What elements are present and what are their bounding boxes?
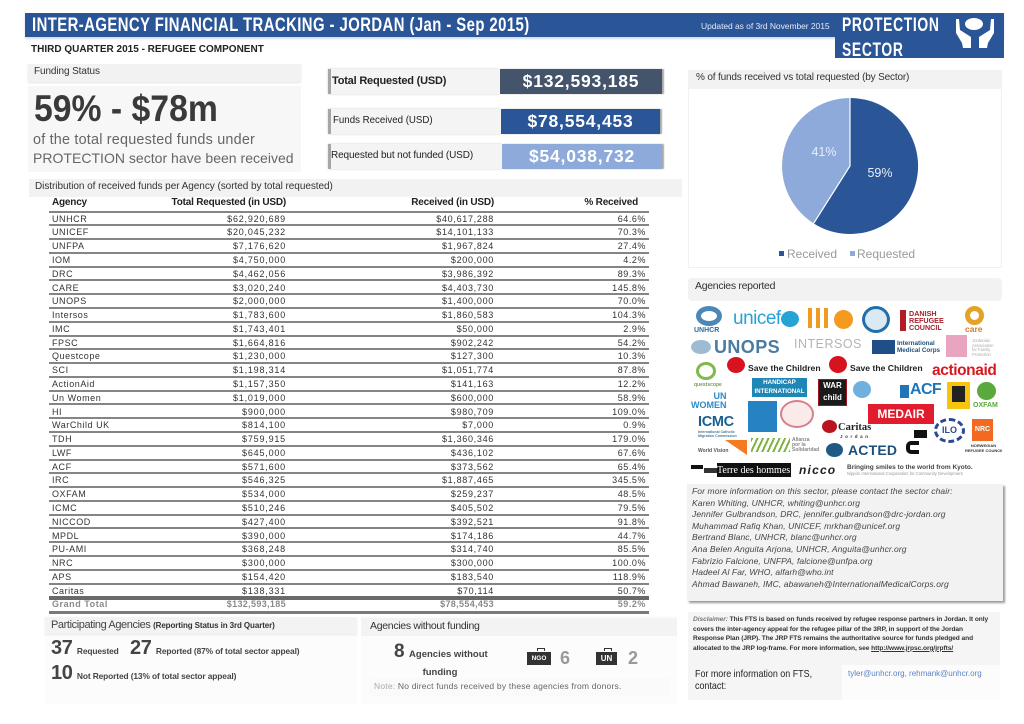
NGO count: 6	[560, 648, 570, 668]
agency funding table: 10.3%	[618, 351, 646, 361]
agency funding table: $1,019,000	[233, 393, 286, 403]
agency funding table: WarChild UK	[52, 420, 110, 430]
logo: Caritas	[822, 420, 871, 439]
logo: NRC: NRC	[975, 426, 990, 433]
agency funding table: $1,887,465	[442, 475, 494, 485]
agency funding table: 4.2%	[623, 255, 646, 265]
logo: World Vision: World Vision	[698, 448, 728, 454]
logo: actionaid: actionaid	[932, 362, 996, 379]
agency funding table: 345.5%	[612, 475, 646, 485]
agency funding table: Caritas	[52, 586, 84, 596]
agency funding table: $368,248	[242, 544, 286, 554]
logo: Intersos: INTERSOS	[794, 337, 862, 351]
pie legend: Received	[787, 247, 837, 261]
agencies without funding count: 8 Agencies without	[394, 641, 488, 662]
funding status heading: Funding Status	[34, 66, 100, 77]
agency funding table: NICCOD	[52, 517, 91, 527]
agency funding table: $62,920,689	[227, 214, 286, 224]
agency funding table: 65.4%	[618, 462, 646, 472]
agency funding table: IRC	[52, 475, 69, 485]
logo: MPDL emblem	[780, 400, 814, 428]
agency funding table: $1,783,600	[233, 310, 286, 320]
logo: Save the Children Jordan: Save the Children	[850, 363, 923, 373]
agency funding table: $3,986,392	[442, 269, 494, 279]
agency funding table: NRC	[52, 558, 73, 568]
agency funding table: 54.2%	[618, 338, 646, 348]
total requested value	[500, 69, 662, 94]
distribution heading: Distribution of received funds per Agency (sorted by total requested)	[35, 181, 333, 192]
logo: NRC	[965, 419, 1002, 453]
pie chart	[779, 98, 918, 261]
grand total row: Grand Total	[52, 599, 108, 609]
not funded label	[328, 144, 502, 169]
logo: dove emblem	[748, 401, 777, 432]
agency funding table: $427,400	[242, 517, 286, 527]
agency funding table: $1,157,350	[233, 379, 286, 389]
logo: UNHCR: UNHCR	[694, 327, 719, 334]
total requested label: Total Requested (USD)	[332, 75, 446, 87]
pie heading	[689, 71, 1001, 89]
panel: funds received	[327, 108, 662, 135]
disclaimer	[688, 612, 1000, 665]
agencies without funding count: funding	[423, 667, 457, 678]
agency funding table: 44.7%	[618, 530, 646, 540]
icon: NGO: NGO	[532, 655, 546, 662]
logo: Alianza por la Solidaridad	[751, 437, 819, 453]
agency funding table: PU-AMI	[52, 544, 87, 554]
without funding heading	[361, 618, 677, 636]
subtitle: THIRD QUARTER 2015 - REFUGEE COMPONENT	[31, 44, 264, 55]
table header: % Received	[584, 197, 638, 208]
logo: FPSC	[946, 335, 994, 357]
logo: unicef: unicef	[733, 308, 781, 329]
agency funding table: UNOPS	[52, 296, 87, 306]
agency funding table: $814,100	[242, 420, 286, 430]
logo: International Medical Corps: International Medical Corps	[897, 340, 940, 354]
logo: UNHCR	[694, 306, 722, 334]
agency funding table: $980,709	[451, 406, 494, 416]
logo: Save the Children: Save the Children	[748, 363, 821, 373]
FTS contact emails	[842, 665, 1000, 700]
headline figure: 59% - $78m	[34, 87, 218, 129]
logo: questcope	[694, 362, 722, 388]
grand total row: 59.2%	[618, 599, 646, 609]
agency funding table: $314,740	[451, 544, 494, 554]
agency funding table: $2,000,000	[233, 296, 286, 306]
agency funding table: $405,502	[451, 503, 494, 513]
header banner	[25, 13, 1004, 37]
agency funding table: $436,102	[451, 448, 494, 458]
logo: PU-AMI arrow	[906, 430, 927, 454]
agency funding table: $1,051,774	[442, 365, 494, 375]
logo: Terre des hommes: Terre des hommes	[717, 465, 790, 476]
agency funding table: 179.0%	[612, 434, 646, 444]
agencies without funding count	[394, 641, 488, 678]
reported count: 27 Reported (87% of total sector appeal)	[130, 637, 299, 659]
agency funding table: 109.0%	[612, 406, 646, 416]
logo: ICMC	[698, 414, 737, 438]
agency funding table: $259,237	[451, 489, 494, 499]
table header	[49, 197, 649, 213]
agency funding table: FPSC	[52, 338, 78, 348]
agency funding table: ACF	[52, 462, 72, 472]
logo: Handicap International: HANDICAP INTERNATIONAL	[754, 379, 805, 394]
agency funding table: 100.0%	[612, 558, 646, 568]
agency funding table: 118.9%	[613, 572, 646, 582]
logo: OXFAM: OXFAM	[973, 402, 998, 409]
agency funding table: HI	[52, 406, 62, 416]
logo: care: care	[965, 324, 982, 334]
agency funding table: UNICEF	[52, 227, 89, 237]
agency funding table: $534,000	[242, 489, 286, 499]
not funded value: $54,038,732	[529, 146, 635, 166]
funds received label: Funds Received (USD)	[333, 115, 433, 126]
agency funding table: Questcope	[52, 351, 100, 361]
logo: care	[965, 306, 984, 334]
icon: protecting hands	[956, 18, 994, 48]
logo: ILO	[934, 418, 965, 443]
panel: participating agencies	[45, 617, 357, 704]
agency funding table: 58.9%	[618, 393, 646, 403]
logo: UNFPA	[808, 308, 853, 329]
agency funding table: $7,176,620	[233, 241, 286, 251]
sector badge	[835, 13, 1004, 58]
logo: FPSC: Jordanian Association for Family Protection	[972, 338, 993, 357]
not funded label: Requested but not funded (USD)	[331, 150, 473, 161]
agency funding table: 89.3%	[618, 269, 646, 279]
table header: Received (in USD)	[411, 197, 494, 208]
total requested label	[328, 69, 500, 94]
update date: Updated as of 3rd November 2015	[701, 21, 830, 31]
agency funding table: $4,462,056	[233, 269, 286, 279]
logo: ACF: ACF	[910, 381, 941, 398]
agency funding table: $7,000	[462, 420, 494, 430]
agency logos	[691, 306, 1002, 477]
funding note	[369, 678, 669, 696]
pie legend	[779, 247, 915, 261]
agency funding table: $40,617,288	[436, 214, 494, 224]
logo: Medair	[868, 404, 934, 424]
logo: ICMC: International Catholic Migration Commission	[698, 430, 737, 438]
logo: Medair: MEDAIR	[877, 407, 925, 421]
agency funding table: 0.9%	[623, 420, 646, 430]
pie legend: Requested	[857, 247, 915, 261]
not reported count: 10 Not Reported (13% of total sector appeal)	[51, 662, 236, 684]
agency funding table: $50,000	[457, 324, 494, 334]
agency funding table: $600,000	[451, 393, 494, 403]
agency funding table: $546,325	[242, 475, 286, 485]
not funded value	[502, 144, 662, 169]
icon: UN: UN	[601, 654, 612, 663]
agency funding table: TDH	[52, 434, 72, 444]
agency funding table: DRC	[52, 269, 73, 279]
panel: sector chair contacts: For more information on this sector, please contact the sector chair: Karen Whiting, UNHCR, whiting@unhcr.org Jennifer Gulbrandson, DRC, jennifer.gulbrandson@drc-jordan.org Muhammad Rafiq Khan, UNICEF, mrkhan@unicef.org Bertrand Blanc, UNHCR, blanc@unhcr.org Ana Belen Anguita Arjona, UNHCR, Anguita@unhcr.org Fabrizio Falcione, UNFPA, falcione@unfpa.org Hadeel Al Far, WHO, alfarh@who.int Ahmad Bawaneh, IMC, abawaneh@InternationalMedicalCorps.org	[692, 486, 953, 589]
agency funding table: $1,230,000	[233, 351, 286, 361]
sector name: PROTECTION SECTOR	[842, 15, 940, 60]
agency funding table: $20,045,232	[227, 227, 286, 237]
agency funding table: Intersos	[52, 310, 88, 320]
table header: Total Requested (in USD)	[172, 197, 286, 208]
agency funding table: OXFAM	[52, 489, 86, 499]
logo: War Child	[818, 379, 847, 406]
grand total row: $132,593,185	[227, 599, 286, 609]
agency funding table: $174,186	[451, 530, 494, 540]
logo: ILO: ILO	[942, 425, 957, 435]
logo: International Medical Corps	[872, 340, 940, 354]
agency funding table: $1,860,583	[442, 310, 494, 320]
agency funding table: $138,331	[242, 586, 286, 596]
agency funding table: $390,000	[242, 530, 286, 540]
logo: Caritas: Jordan	[840, 434, 871, 439]
logo: Save the Children Jordan	[829, 356, 923, 373]
logo: Save the Children	[727, 357, 821, 373]
agency funding table: 104.3%	[612, 310, 646, 320]
agencies heading	[688, 278, 1002, 301]
agency funding table: 67.6%	[618, 448, 646, 458]
funds received value: $78,554,453	[527, 111, 634, 131]
logo: NICCO: Bringing smiles to the world from Kyoto.	[847, 464, 973, 471]
agency funding table: 79.5%	[618, 503, 646, 513]
logo: ICMC: ICMC	[698, 414, 734, 430]
agency funding table: $759,915	[242, 434, 286, 444]
title: INTER-AGENCY FINANCIAL TRACKING - JORDAN (Jan - Sep 2015)	[32, 15, 530, 36]
agency funding table: $300,000	[451, 558, 494, 568]
logo: UN Women: UN WOMEN	[691, 391, 726, 410]
panel: pie chart	[688, 70, 1002, 268]
logo: NICCO: nicco	[799, 463, 836, 477]
agency funding table: UNFPA	[52, 241, 85, 251]
agency funding table: $4,403,730	[442, 282, 494, 292]
agency funding table: $1,360,346	[442, 434, 494, 444]
total requested value: $132,593,185	[523, 71, 639, 91]
funding headline body	[28, 86, 301, 172]
agency funding table: $510,246	[242, 503, 286, 513]
logo: ACTED	[826, 442, 897, 458]
agency funding table	[49, 197, 649, 614]
funds received value	[501, 109, 660, 134]
agency funding table: 87.8%	[618, 365, 646, 375]
logo: War Child: WAR child	[823, 381, 842, 402]
requested count: 37 Requested	[51, 637, 119, 659]
agency funding table: IMC	[52, 324, 70, 334]
agency funding table: MPDL	[52, 530, 79, 540]
logo: Terre des hommes	[691, 463, 791, 477]
agency funding table: $571,600	[242, 462, 286, 472]
logo: LWF	[853, 381, 871, 398]
logo: IRC	[947, 382, 970, 409]
agency funding table: $645,000	[242, 448, 286, 458]
agency funding table: APS	[52, 572, 72, 582]
agency funding table: $1,400,000	[442, 296, 494, 306]
panel: agencies without funding	[361, 616, 677, 704]
pie heading: % of funds received vs total requested (by Sector)	[696, 72, 909, 83]
grand total row	[49, 599, 649, 614]
agency funding table: 64.6%	[618, 214, 646, 224]
agency funding table: $3,020,240	[233, 282, 286, 292]
agency funding table: 91.8%	[618, 517, 646, 527]
without funding heading: Agencies without funding	[370, 620, 480, 632]
participating heading: Participating Agencies (Reporting Status in 3rd Quarter)	[51, 619, 275, 631]
agency funding table: $902,242	[451, 338, 494, 348]
logo: questcope: questscope	[694, 382, 722, 388]
grand total row: $78,554,453	[440, 599, 494, 609]
agency funding table: $1,743,401	[233, 324, 286, 334]
agency funding table: $4,750,000	[233, 255, 286, 265]
agency funding table: $373,562	[451, 462, 494, 472]
agency funding table: ActionAid	[52, 379, 95, 389]
agency funding table: 85.5%	[618, 544, 646, 554]
logo: UNOPS: UNOPS	[714, 337, 780, 357]
logo: OXFAM	[973, 382, 998, 409]
agency funding table: $70,114	[457, 586, 494, 596]
panel: total requested	[327, 68, 664, 95]
agency funding table: $300,000	[242, 558, 286, 568]
table header: Agency	[52, 197, 87, 208]
agency funding table: $1,198,314	[233, 365, 286, 375]
FTS contact text: For more information on FTS, contact:	[695, 668, 812, 692]
UN count: 2	[628, 648, 638, 668]
agency funding table: $14,101,133	[436, 227, 494, 237]
funding status heading	[28, 64, 301, 82]
logo: Caritas: Caritas	[838, 422, 871, 433]
FTS contact emails: tyler@unhcr.org, rehmank@unhcr.org	[848, 669, 982, 678]
agency funding table: ICMC	[52, 503, 77, 513]
agency funding table: $900,000	[242, 406, 286, 416]
disclaimer: Disclaimer: This FTS is based on funds received by refugee response partners in Jordan. It only covers the inter-agency appeal for the refugee pillar of the 3RP, in support of the Jordan Response Plan (JRP). The JRP FTS remains the authoritative source for funds pledged and allocated to the JRP log-frame. For more information, see http://www.jrpsc.org/jrpfts/	[693, 616, 988, 652]
agency funding table: 145.8%	[612, 282, 646, 292]
agency funding table: LWF	[52, 448, 72, 458]
agency funding table: 70.0%	[618, 296, 646, 306]
logo: ACTED: ACTED	[848, 442, 897, 458]
FTS contact label	[688, 665, 842, 700]
participating heading	[45, 617, 357, 634]
headline description: of the total requested funds under PROTECTION sector have been received	[33, 132, 294, 166]
agency funding table: Un Women	[52, 393, 101, 403]
pie label 59%: 59%	[867, 166, 893, 180]
agency funding table: $141,163	[451, 379, 494, 389]
logo: World Vision	[698, 440, 747, 455]
agency funding table: $1,967,824	[442, 241, 494, 251]
agency funding table: 2.9%	[623, 324, 646, 334]
agency funding table: SCI	[52, 365, 69, 375]
distribution heading	[29, 179, 682, 197]
logo: Alianza por la Solidaridad: Alianza por la Solidaridad	[792, 437, 819, 453]
agency funding table: $154,420	[242, 572, 286, 582]
panel: requested not funded	[327, 143, 664, 170]
agency funding table: $1,664,816	[233, 338, 286, 348]
logo: NICCO	[799, 463, 973, 477]
logo: NICCO: Nippon International Cooperation for Community Development	[847, 471, 963, 476]
agencies heading: Agencies reported	[695, 280, 775, 292]
agency funding table: 70.3%	[618, 227, 646, 237]
funds received label	[328, 109, 501, 134]
agency funding table: 48.5%	[618, 489, 646, 499]
pie label 41%: 41%	[811, 145, 837, 159]
agency funding table: $392,521	[451, 517, 494, 527]
agency funding table: $127,300	[451, 351, 494, 361]
logo: DRC: DANISH REFUGEE COUNCIL	[909, 309, 944, 332]
agency funding table: $183,540	[451, 572, 494, 582]
agency funding table: $200,000	[451, 255, 494, 265]
agency funding table: UNHCR	[52, 214, 87, 224]
agency funding table: 27.4%	[618, 241, 646, 251]
agency funding table: 50.7%	[618, 586, 646, 596]
panel: agencies reported	[688, 278, 1002, 477]
funding note: Note: No direct funds received by these agencies from donors.	[374, 681, 622, 691]
agency funding table: IOM	[52, 255, 71, 265]
agency funding table: 12.2%	[618, 379, 646, 389]
logo: IOM	[862, 306, 890, 333]
agency funding table: CARE	[52, 282, 79, 292]
panel: funding status	[28, 64, 302, 166]
